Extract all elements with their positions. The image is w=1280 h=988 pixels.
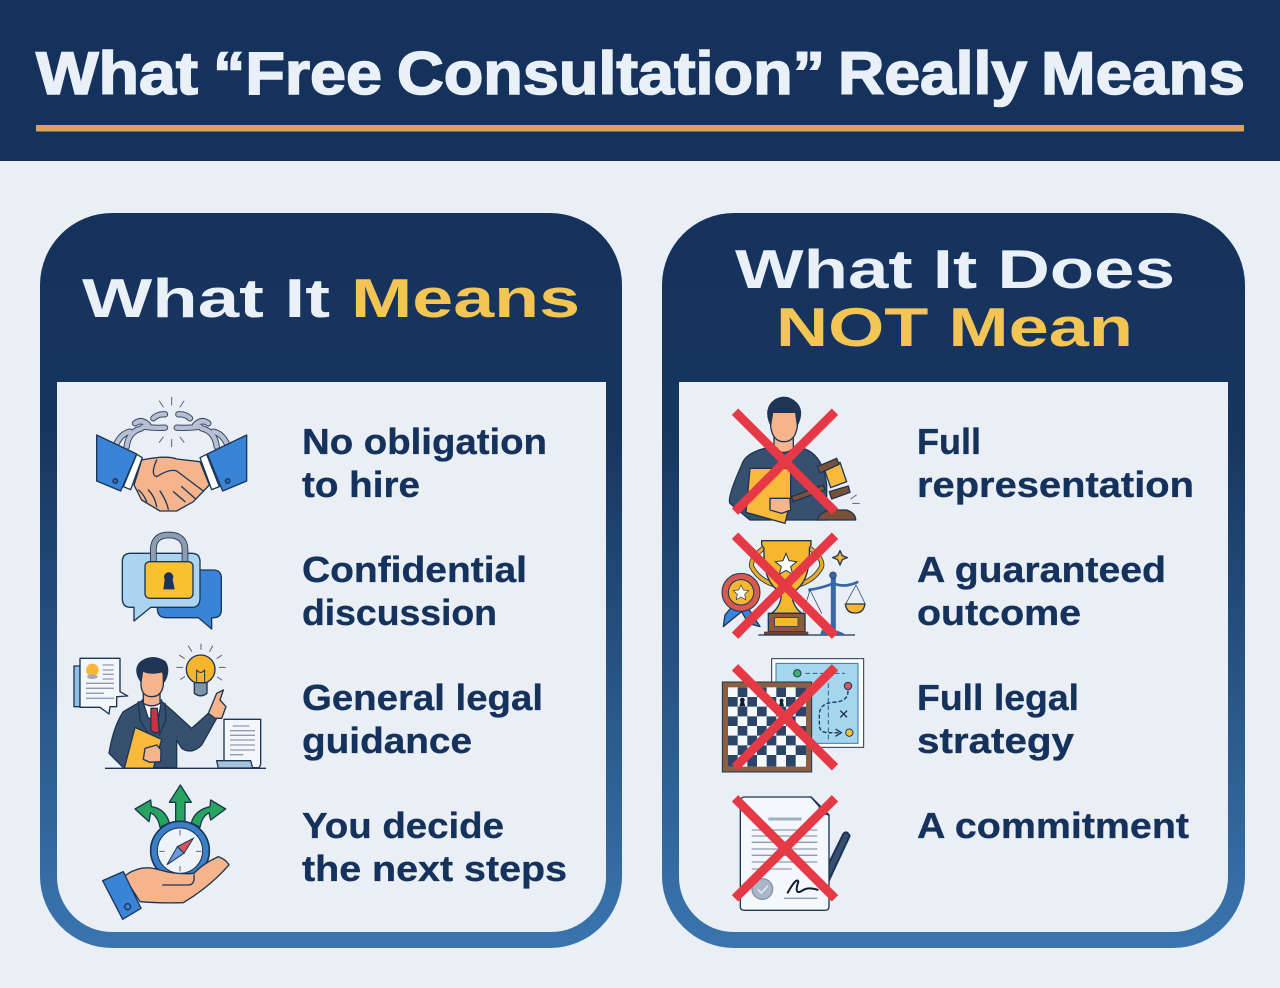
heading: what it means: Means: [351, 267, 580, 329]
icon: crossed-out signed document and pen: [735, 797, 850, 910]
title: Means: [1041, 40, 1245, 107]
title: Really: [838, 40, 1028, 107]
title: Consultation”: [397, 40, 825, 107]
title: What: [36, 40, 198, 107]
icon: crossed-out trophy and scales: [722, 536, 865, 636]
heading: what it does not mean: What It Does: [735, 238, 1175, 300]
text: full legal strategy: Full legal: [917, 677, 1079, 718]
text: full legal strategy: strategy: [917, 720, 1074, 761]
heading: what it means: What It: [82, 267, 330, 329]
text: full representation: Full: [917, 421, 981, 462]
panel: what it does not mean: [662, 213, 1245, 948]
heading: what it does not mean: [735, 238, 1175, 358]
heading: what it does not mean: NOT Mean: [776, 296, 1133, 358]
icon: handshake with broken chains: [97, 397, 247, 511]
text: you decide the next steps: the next steps: [302, 848, 567, 889]
title: “Free: [213, 40, 382, 107]
text: full representation: representation: [917, 464, 1194, 505]
text: you decide the next steps: You decide: [302, 805, 504, 846]
text: a guaranteed outcome: outcome: [917, 592, 1081, 633]
text: confidential discussion: Confidential: [302, 549, 527, 590]
icon: crossed-out lawyer with gavel: [729, 397, 859, 523]
text: a commitment: A commitment: [917, 805, 1189, 846]
icon: lawyer with light bulb: [74, 644, 266, 768]
text: general legal guidance: General legal: [302, 677, 543, 718]
text: confidential discussion: discussion: [302, 592, 497, 633]
text: a guaranteed outcome: A guaranteed: [917, 549, 1166, 590]
header banner: [0, 0, 1280, 161]
panel: what it means: [40, 213, 622, 948]
heading: what it means: [82, 267, 580, 329]
icon: crossed-out chessboard and strategy map: [722, 659, 864, 772]
icon: padlock with speech bubbles: [122, 535, 221, 629]
icon: compass in hand: [103, 785, 229, 919]
title: [36, 40, 1245, 107]
text: no obligation to hire: to hire: [302, 464, 420, 505]
text: general legal guidance: guidance: [302, 720, 472, 761]
text: no obligation to hire: No obligation: [302, 421, 547, 462]
